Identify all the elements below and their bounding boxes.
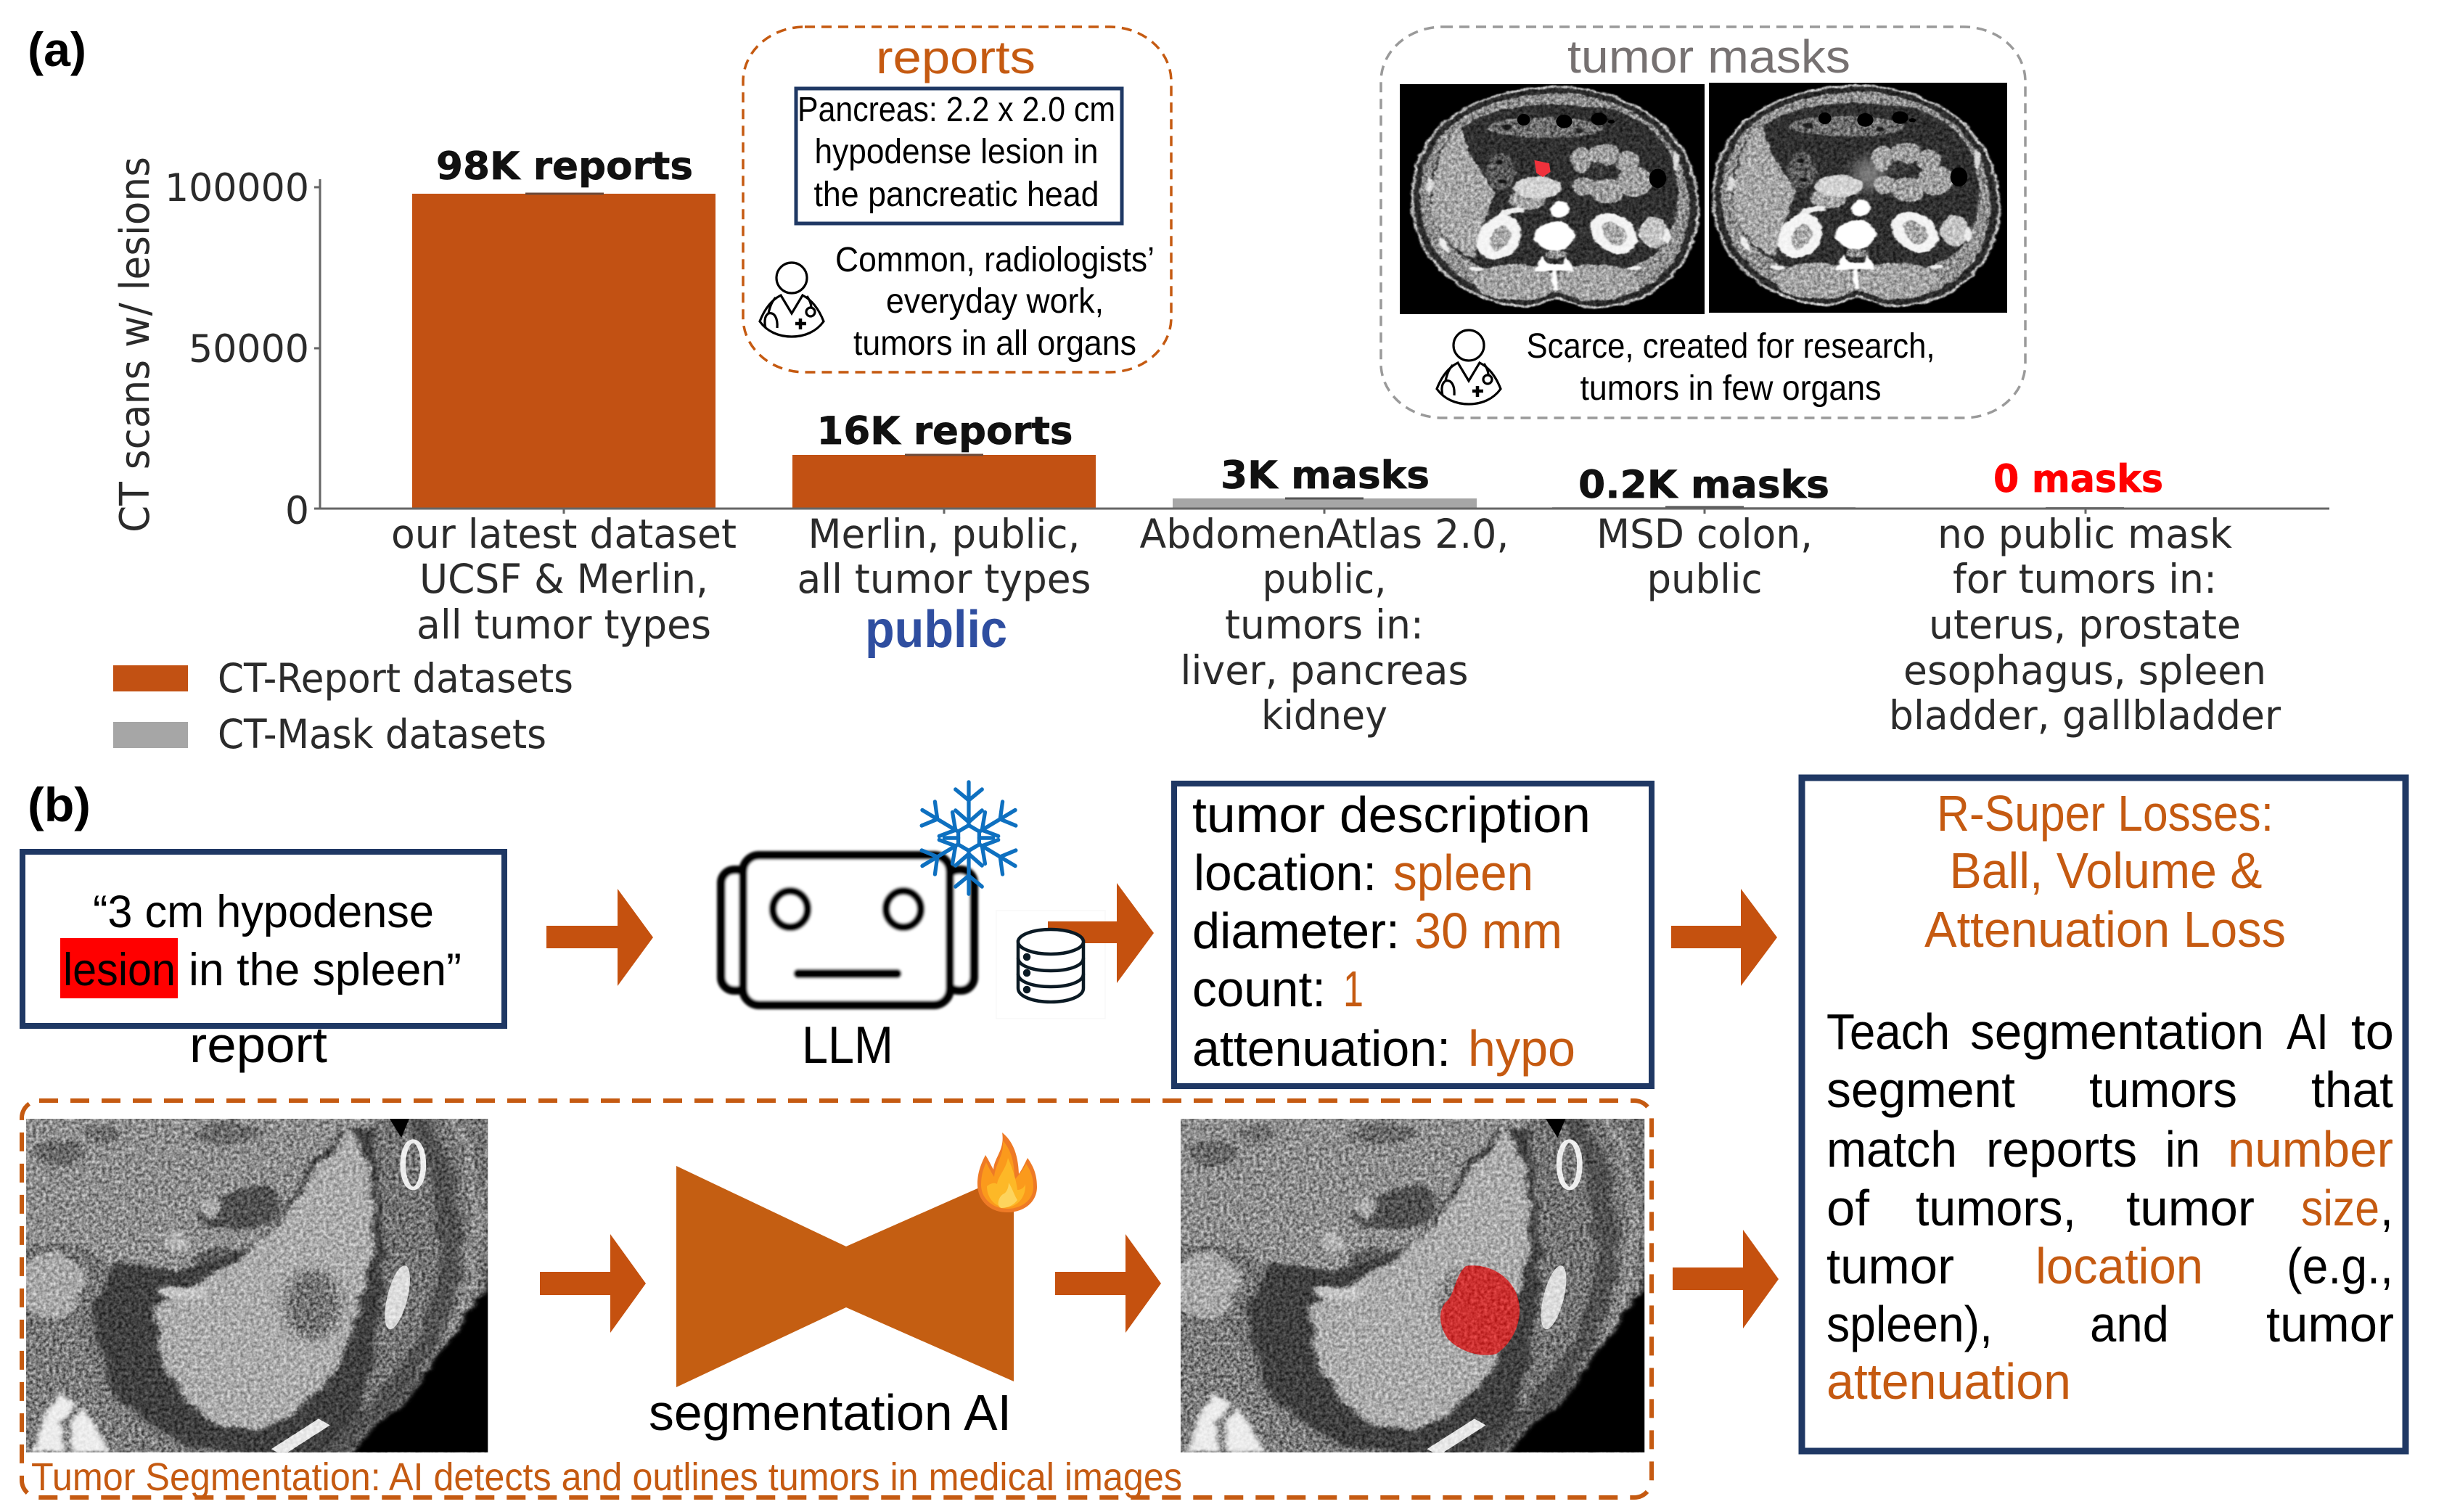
losses body text: to [2351,1003,2394,1060]
panel label (b): (b) [28,778,91,831]
icon: snowflake [916,782,1022,894]
panel: tumor masks callout [1381,27,2025,418]
y axis ticks and tick labels: 0 [285,489,309,533]
sample report box: the pancreatic head [814,176,1099,214]
losses body text: tumors, [1916,1180,2076,1236]
y axis ticks and tick labels: 50000 [189,327,309,371]
losses body text: (e.g., [2287,1238,2393,1294]
sample report box [796,89,1122,223]
x label: no public mask: for tumors in: [1953,556,2217,602]
bar: 3K masks: 3K masks [1221,453,1430,498]
report input box: in the spleen” [189,945,462,995]
tumor description box [1174,784,1652,1086]
tumor masks caption: tumors in few organs [1580,369,1881,408]
reports caption [835,241,1155,363]
losses heading: R-Super Losses: [1937,785,2273,842]
x label: AbdomenAtlas 2.0: liver, pancreas [1180,647,1469,694]
icon: LLM robot [721,855,974,1005]
arrow: tumor description to losses [1671,889,1777,986]
x label: no public mask [1889,511,2281,739]
losses body text: spleen), [1826,1296,1993,1352]
report input box [22,852,504,1026]
CT image without mask [1709,83,2007,313]
losses body text: number [2228,1121,2393,1178]
x label: MSD colon: MSD colon, [1596,511,1813,557]
x label: AbdomenAtlas 2.0: public, [1263,556,1386,602]
arrow: CT to segmentation AI [540,1234,646,1333]
reports caption: everyday work, [886,282,1104,321]
x label: MSD colon: public [1647,556,1762,602]
arrow: segmentation AI to output [1055,1234,1161,1333]
x label: MSD colon [1596,511,1813,602]
losses body text: AI [2287,1003,2329,1060]
tumor description box: hypo [1468,1020,1575,1077]
x label: AbdomenAtlas 2.0: AbdomenAtlas 2.0, [1139,511,1509,557]
tumor description box: tumor description [1192,786,1591,843]
reports caption: Common, radiologists’ [835,241,1155,279]
legend: CT-Report datasets [218,655,573,702]
legend [113,655,573,757]
losses body text: of [1826,1180,1870,1236]
CT image with red tumor mask [1400,84,1705,314]
x label: Merlin, public [797,511,1091,602]
losses body text: attenuation [1826,1353,2071,1410]
losses body text: match [1826,1121,1957,1178]
tumor masks heading: tumor masks [1567,30,1850,83]
CT image: input [0,1101,535,1480]
x label: our latest dataset [391,511,737,648]
x label: no public mask: bladder, gallbladder [1889,692,2281,739]
losses body text [1826,1003,2394,1410]
icon: flame [977,1133,1037,1212]
losses body text: , [2380,1180,2393,1236]
arrow: report to LLM [546,889,653,986]
report input box: lesion [63,945,176,995]
LLM caption: LLM [802,1016,893,1075]
x label: no public mask: esophagus, spleen [1903,647,2266,694]
bar: 98K reports [412,144,715,509]
bar: 16K reports: 16K reports [817,409,1073,453]
losses body text: and [2090,1296,2169,1352]
x label: Merlin, public: Merlin, public, [808,511,1080,557]
sample report box: Pancreas: 2.2 x 2.0 cm [797,91,1115,129]
losses body text: reports [1986,1121,2137,1178]
x label: our latest dataset: UCSF & Merlin, [419,556,708,602]
bar: 3K masks [1173,453,1477,509]
losses heading: Attenuation Loss [1924,901,2286,958]
bar: 0 masks: 0 masks [1993,457,2163,501]
sample report box: hypodense lesion in [814,133,1099,171]
tumor description box: diameter: [1192,903,1400,959]
x label: AbdomenAtlas 2.0: kidney [1261,692,1387,739]
losses heading: Ball, Volume & [1949,842,2263,899]
panel label (a): (a) [28,22,86,76]
x label: no public mask: no public mask [1938,511,2232,557]
panel: bar chart of CT scans with lesions [112,144,2329,757]
report caption: report [189,1016,327,1073]
x label: our latest dataset: all tumor types [417,601,711,648]
arrow: segmentation output to losses [1673,1230,1779,1328]
losses body text: Teach [1826,1003,1950,1060]
losses body text: segment [1826,1061,2015,1118]
tumor masks caption: Scarce, created for research, [1527,327,1935,366]
tumor description box: spleen [1393,845,1533,901]
icon: database [1018,929,1083,1002]
x label: AbdomenAtlas 2.0: tumors in: [1225,601,1424,648]
bar: 98K reports: 98K reports [436,144,693,189]
CT image: output with red tumor [1155,1101,1692,1480]
losses body text: that [2311,1061,2393,1118]
tumor description box: count: [1192,961,1326,1017]
database backing tile [996,911,1105,1019]
x axis line [320,509,2329,514]
bar: 0.2K masks: 0.2K masks [1578,463,1829,507]
tumor description box: attenuation: [1192,1020,1451,1077]
panel: reports callout [743,27,1171,372]
legend: CT-Mask datasets [218,711,546,757]
segmentation description: Tumor Segmentation: AI detects and outlines tumors in medical images [31,1455,1182,1499]
losses body text: tumors [2089,1061,2237,1118]
losses body text: location [2035,1238,2203,1294]
x label: no public mask: uterus, prostate [1929,601,2241,648]
arrow: LLM to tumor description [1048,883,1154,983]
losses body text: segmentation [1970,1003,2264,1060]
losses body text: in [2165,1121,2200,1178]
tumor description box: 30 mm [1414,903,1562,959]
bar: 16K reports [792,409,1096,509]
losses body text: tumor [1826,1238,1954,1294]
losses body text: size [2301,1180,2379,1236]
report input box: “3 cm hypodense [93,887,434,937]
losses heading [1924,785,2286,958]
y axis ticks and tick labels: 100000 [165,166,309,210]
reports caption: tumors in all organs [853,324,1136,363]
tumor description box: 1 [1343,961,1364,1017]
public highlight: public [865,601,1007,659]
x label: our latest dataset: our latest dataset [391,511,737,557]
icon: segmentation network bowtie [676,1166,1014,1387]
panel: tumor segmentation dashed frame [0,1101,1692,1499]
icon: doctor [1437,330,1501,404]
tumor description box: location: [1194,845,1377,901]
x label: AbdomenAtlas 2.0 [1139,511,1509,739]
x label: Merlin, public: all tumor types [797,556,1091,602]
y axis label: CT scans w/ lesions [112,157,159,533]
tumor masks caption [1527,327,1935,408]
y axis ticks and tick labels [165,166,320,533]
panel: R-Super losses [1802,778,2406,1451]
reports heading: reports [876,31,1036,83]
losses body text: tumor [2266,1296,2394,1352]
icon: doctor [760,263,824,337]
segmentation AI caption: segmentation AI [649,1384,1012,1441]
losses body text: tumor [2126,1180,2255,1236]
